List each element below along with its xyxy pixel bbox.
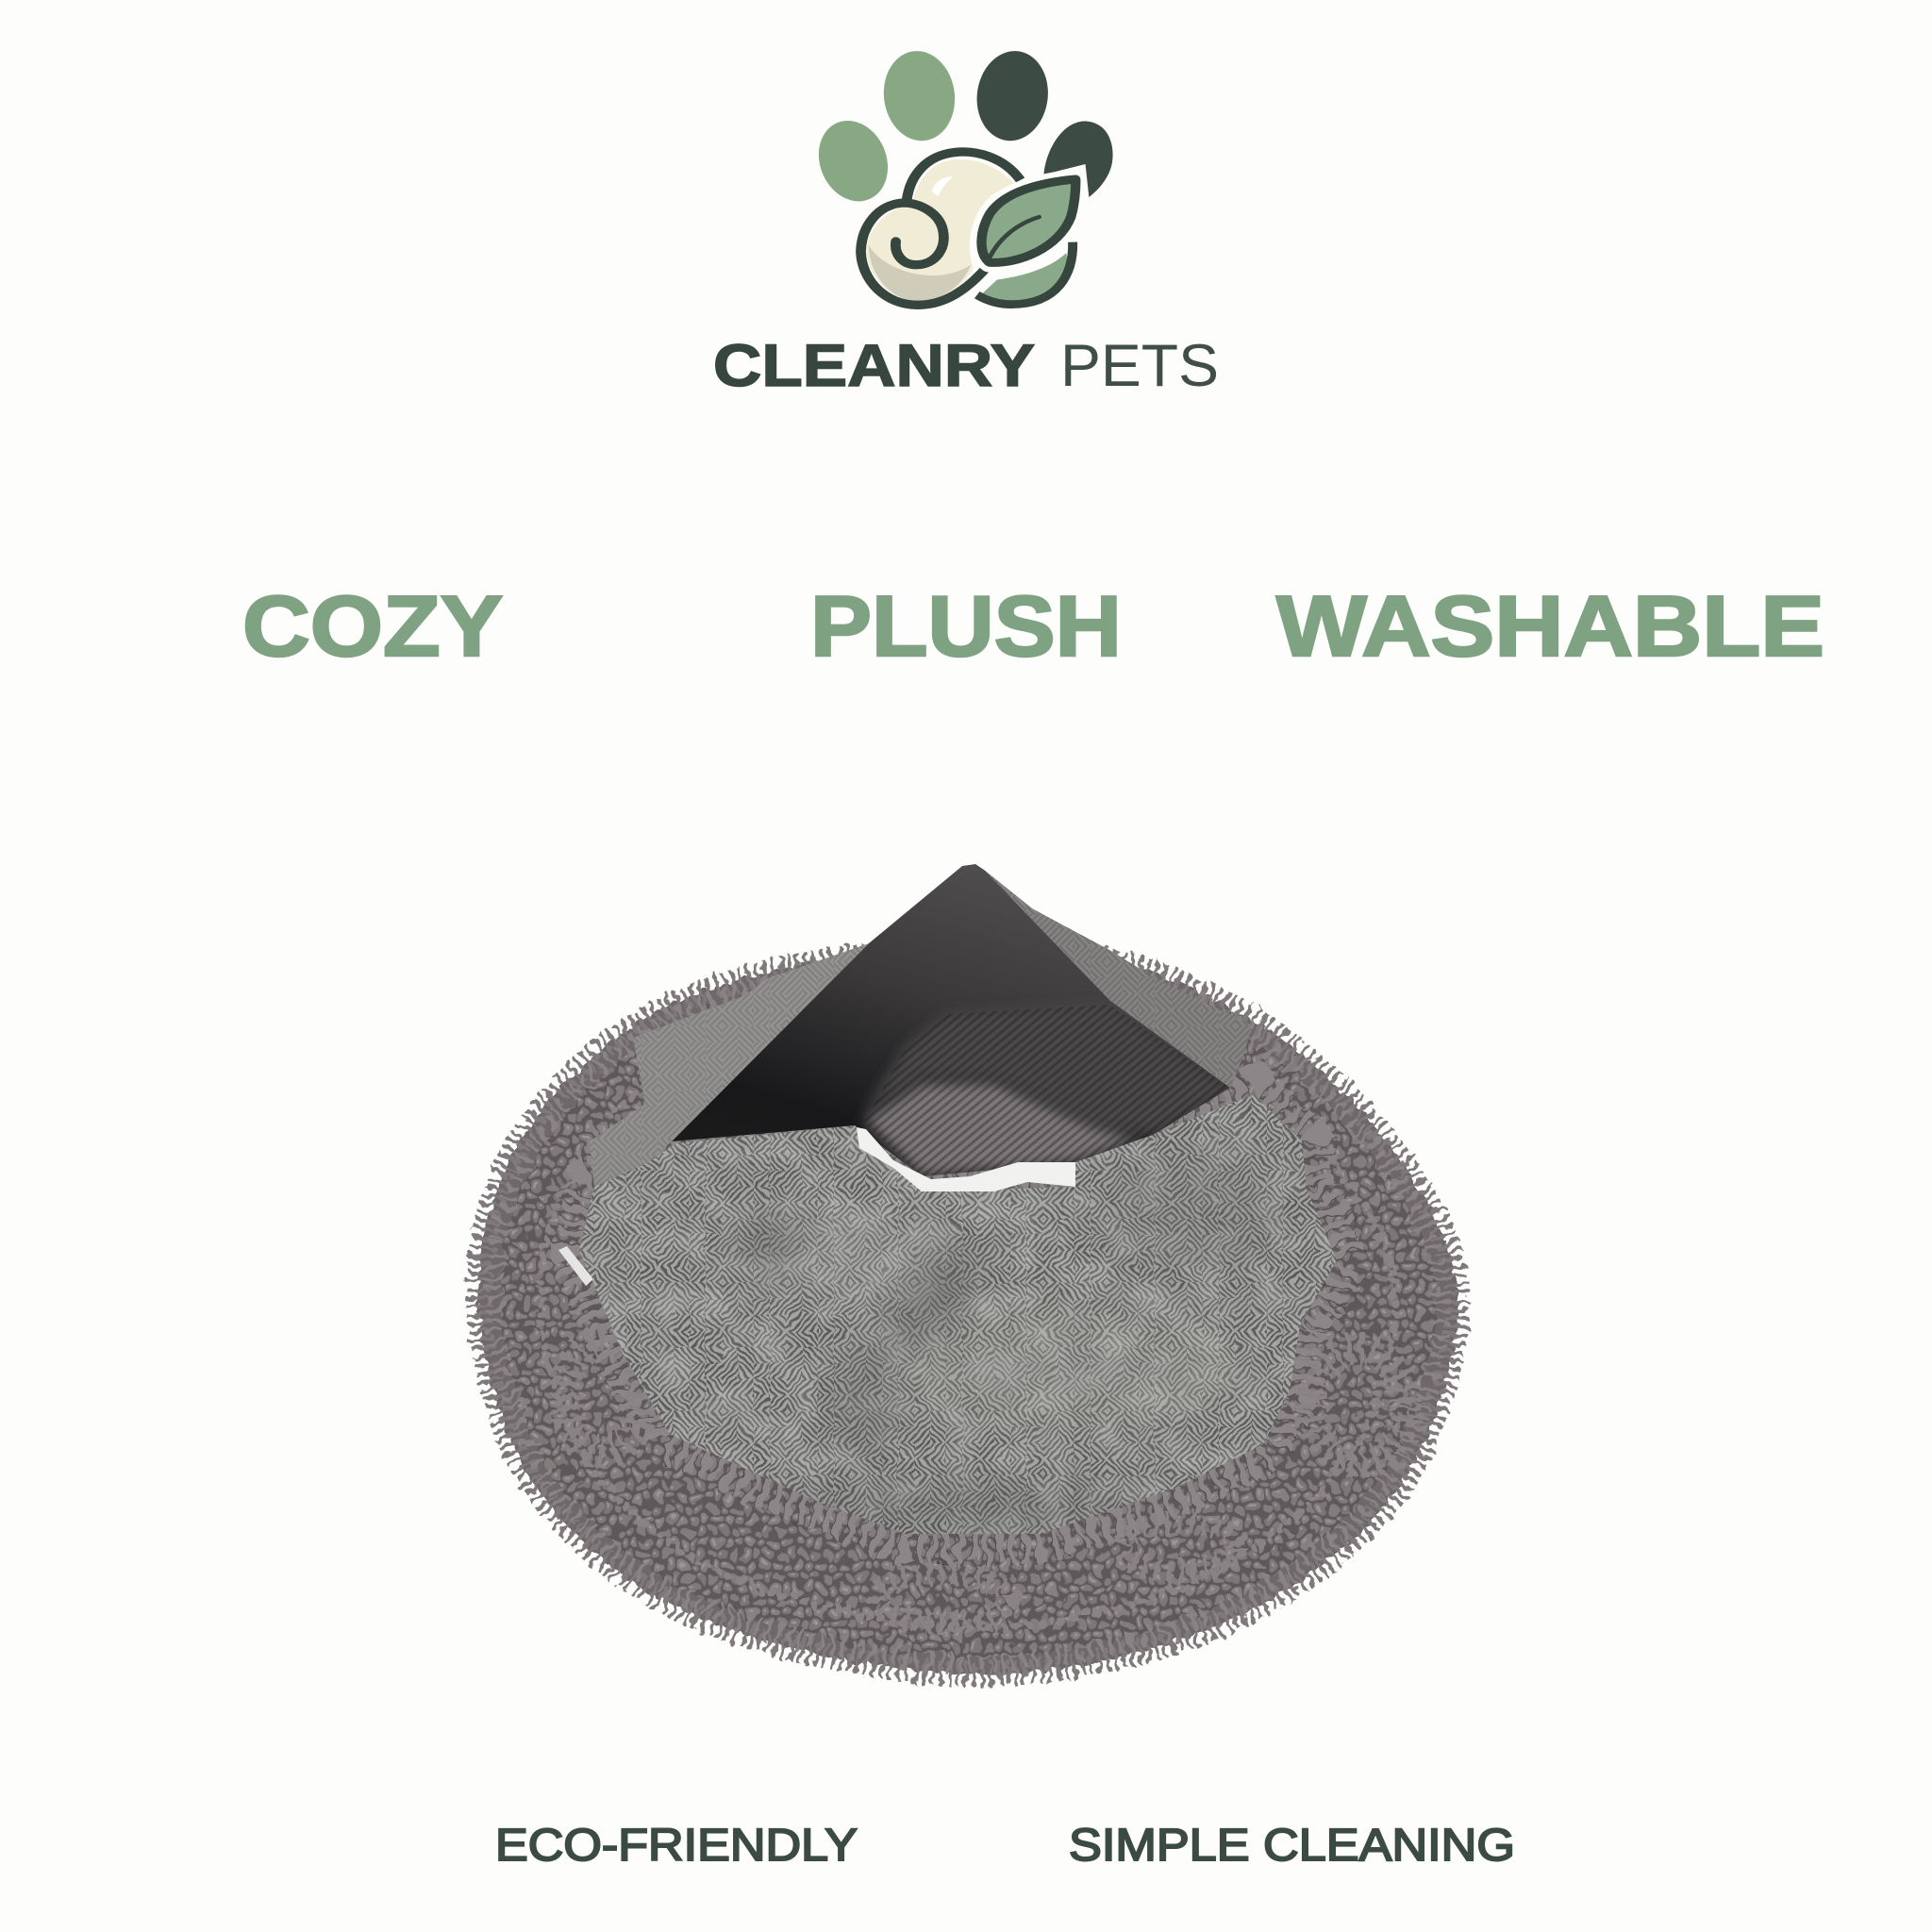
brand name bold: CLEANRY — [713, 333, 1035, 399]
left folded flap — [590, 943, 869, 1187]
headline: plush: PLUSH — [810, 579, 1122, 675]
pocket twill lines — [864, 1005, 1230, 1176]
pocket upper shadow band — [864, 1005, 1230, 1135]
icon: body highlight — [932, 176, 953, 196]
feature label: eco-friendly: ECO-FRIENDLY — [495, 1821, 858, 1871]
brand name light: PETS — [1060, 333, 1219, 399]
pocket back weave — [864, 1005, 1230, 1176]
logo: paw mark — [809, 48, 1113, 305]
icon: left inner toe — [879, 48, 959, 143]
icon: body outline top — [907, 152, 1021, 201]
icon: lower leaf — [982, 253, 1067, 301]
feature label: simple cleaning: SIMPLE CLEANING — [1069, 1821, 1515, 1871]
chenille border — [478, 952, 1457, 1674]
white side tag — [558, 1246, 593, 1286]
logo wordmark — [713, 333, 1219, 399]
chenille tufts — [566, 1340, 1406, 1624]
headline: cozy: COZY — [242, 579, 503, 675]
icon: spiral outline — [860, 203, 987, 305]
product photo: chenille drying mat — [478, 864, 1457, 1674]
icon: cream body — [866, 159, 1015, 301]
headline: washable: WASHABLE — [1276, 579, 1824, 675]
white hanging loop — [857, 1127, 1075, 1191]
icon: body shadow — [869, 245, 971, 301]
icon: left outer toe — [809, 114, 897, 208]
open pocket interior — [672, 864, 1230, 1176]
pocket lower lit area — [864, 1083, 1139, 1176]
icon: lower leaf outline — [977, 242, 1073, 305]
right folded flap — [984, 870, 1252, 1088]
icon: right outer toe — [1044, 121, 1113, 197]
main terry fabric panel — [579, 1094, 1337, 1534]
icon: leaf — [982, 179, 1075, 263]
icon: right inner toe — [973, 48, 1052, 143]
